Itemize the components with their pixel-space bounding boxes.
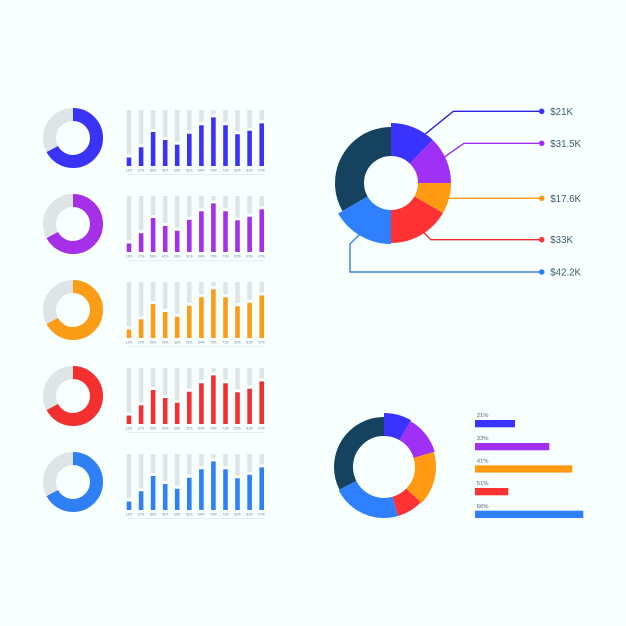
bar: 33% [475,436,549,450]
row 3: orange bar chart: 12% [126,341,132,345]
row 4: red bar chart: 79% [210,427,217,431]
row 2: purple bar chart [126,196,265,260]
callout: $21K: $21K [550,107,573,118]
row 4: red bar chart: 53% [150,427,156,431]
row 4: red donut [50,372,96,420]
row 5: light blue bar chart: 27% [138,513,144,517]
row 1: blue bar chart: 33% [174,169,181,173]
row 3: orange bar chart: 71% [222,341,229,345]
row 5: light blue bar chart: 71% [222,513,229,517]
row 4: red bar chart: 33% [174,427,181,431]
bar: 66% [475,504,583,518]
row 3: orange bar chart: 53% [150,341,156,345]
row 3: orange bar chart: 52% [234,341,241,345]
callout: $31.5K [443,139,582,158]
row 3: orange bar chart: 67% [259,341,265,345]
callout: $21K [424,107,573,135]
row 2: purple bar chart: 64% [198,255,205,259]
callout: $33K [423,232,573,246]
row 4: red bar chart [126,368,265,432]
callout: $42.2K [350,232,582,278]
bar: 21%: 21% [477,413,489,419]
row 3: orange bar chart: 33% [174,341,181,345]
row 3: orange donut [50,286,96,334]
row 2: purple bar chart: 79% [210,255,217,259]
row 1: blue bar chart: 12% [126,169,132,173]
bar: 21% [475,413,515,427]
row 1: blue bar chart: 79% [210,169,217,173]
bar: 66%: 66% [477,504,489,510]
row 4: red bar chart: 67% [259,427,265,431]
panel: small charts column [50,110,265,518]
row 4: red bar chart: 27% [138,427,144,431]
row 5: light blue bar chart: 79% [210,513,217,517]
row 4: red bar chart: 41% [162,427,169,431]
row 1: blue bar chart [126,110,265,174]
row 1: blue donut [50,114,96,162]
row 3: orange bar chart: 41% [162,341,169,345]
row 1: blue bar chart: 52% [234,169,241,173]
row 1: blue bar chart: 67% [259,169,265,173]
bar: 51%: 51% [477,481,489,487]
bar: 33%: 33% [477,436,489,442]
row 5: light blue donut [50,458,96,506]
panel: lower donut and horizontal bars [342,413,583,518]
row 4: red bar chart: 61% [246,427,253,431]
row 2: purple bar chart: 12% [126,255,132,259]
row 5: light blue bar chart: 61% [246,513,253,517]
row 4: red bar chart: 12% [126,427,132,431]
row 3: orange bar chart: 61% [246,341,253,345]
row 2: purple bar chart: 61% [246,255,253,259]
row 1: blue bar chart: 71% [222,169,229,173]
row 2: purple bar chart: 33% [174,255,181,259]
row 2: purple bar chart: 67% [259,255,265,259]
row 5: light blue bar chart: 41% [162,513,169,517]
bar: 51% [475,481,508,495]
row 5: light blue bar chart: 12% [126,513,132,517]
row 2: purple bar chart: 51% [186,255,193,259]
large donut chart [347,139,435,227]
row 3: orange bar chart: 27% [138,341,144,345]
row 2: purple bar chart: 53% [150,255,156,259]
row 3: orange bar chart: 64% [198,341,205,345]
row 1: blue bar chart: 61% [246,169,253,173]
row 5: light blue bar chart: 33% [174,513,181,517]
row 4: red bar chart: 51% [186,427,193,431]
row 5: light blue bar chart: 52% [234,513,241,517]
row 5: light blue bar chart: 53% [150,513,156,517]
callout: $31.5K: $31.5K [550,139,582,150]
bar: 41% [475,458,572,473]
row 2: purple bar chart: 41% [162,255,169,259]
row 5: light blue bar chart: 51% [186,513,193,517]
row 1: blue bar chart: 53% [150,169,156,173]
callout: $33K: $33K [550,235,573,246]
row 3: orange bar chart [126,282,265,346]
row 1: blue bar chart: 64% [198,169,205,173]
row 3: orange bar chart: 51% [186,341,193,345]
row 2: purple bar chart: 71% [222,255,229,259]
callout: $17.6K: $17.6K [550,194,582,205]
row 5: light blue bar chart [126,454,265,518]
bar: 41%: 41% [477,458,489,464]
row 4: red bar chart: 52% [234,427,241,431]
row 2: purple bar chart: 52% [234,255,241,259]
row 4: red bar chart: 64% [198,427,205,431]
row 1: blue bar chart: 27% [138,169,144,173]
row 4: red bar chart: 71% [222,427,229,431]
row 3: orange bar chart: 79% [210,341,217,345]
panel: large donut with callouts [347,107,582,278]
row 1: blue bar chart: 41% [162,169,169,173]
callout: $17.6K [446,194,582,205]
row 2: purple donut [50,200,96,248]
row 1: blue bar chart: 51% [186,169,193,173]
row 2: purple bar chart: 27% [138,255,144,259]
lower donut chart [342,424,426,510]
row 5: light blue bar chart: 67% [259,513,265,517]
callout: $42.2K: $42.2K [550,268,582,278]
row 5: light blue bar chart: 64% [198,513,205,517]
